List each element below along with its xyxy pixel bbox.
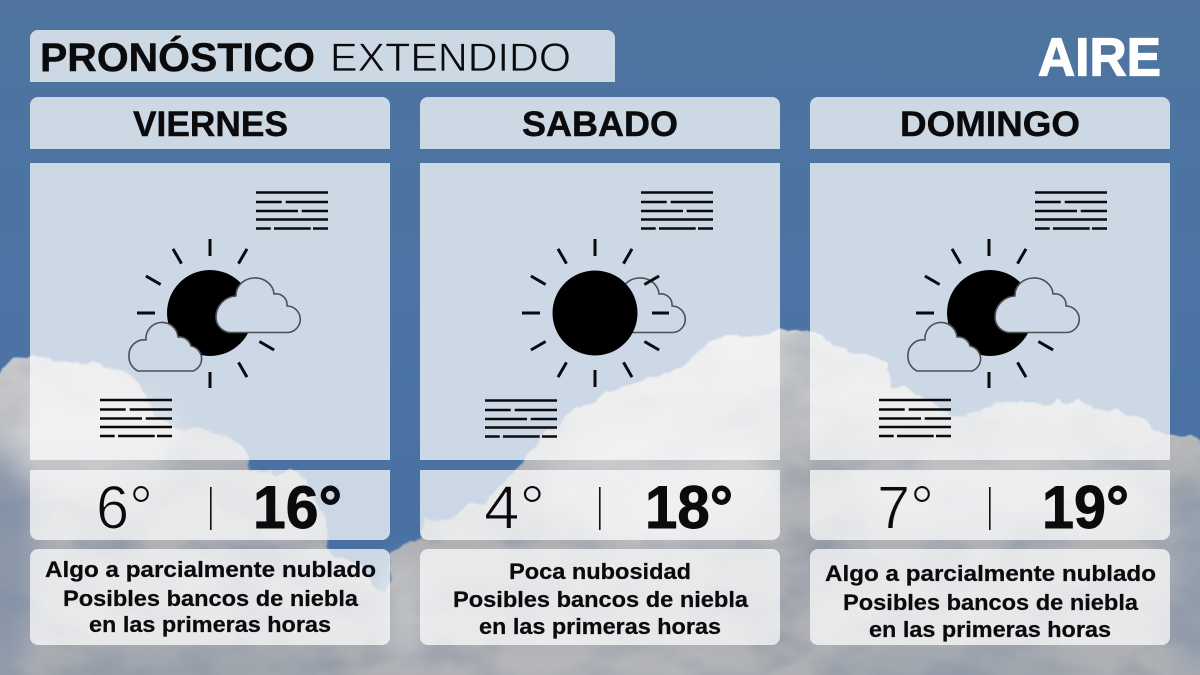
panel: viernes [30, 97, 390, 645]
description: sabado: Poca nubosidad [509, 559, 691, 584]
temperatures: domingo [810, 470, 1170, 542]
icon area: sabado [420, 163, 780, 460]
description: sabado [420, 549, 780, 645]
icon: cloud right [216, 278, 300, 332]
day heading: sabado: SABADO [522, 105, 678, 144]
description: domingo [810, 549, 1170, 645]
icon: fog top [256, 192, 328, 228]
logo: AIRE: AIRE [1038, 28, 1161, 88]
temperatures: sabado: 18° [645, 474, 733, 541]
icon: fog top [641, 192, 713, 228]
panel: sabado [420, 97, 780, 645]
icon: fog top [1035, 192, 1107, 228]
day heading: viernes: VIERNES [133, 105, 288, 144]
day heading: domingo [810, 97, 1170, 149]
icon: cloud left [129, 322, 202, 371]
icon area: viernes [30, 163, 390, 460]
icon area: domingo [810, 163, 1170, 460]
temperatures: viernes: 16° [253, 474, 342, 541]
description: viernes: Algo a parcialmente nublado [45, 557, 376, 582]
icon: fog bottom [879, 400, 951, 436]
icon: sun [522, 239, 669, 387]
icon: cloud behind sun [601, 278, 685, 332]
description: viernes: en las primeras horas [89, 612, 331, 637]
description: viernes: Posibles bancos de niebla [63, 586, 359, 611]
temperatures: domingo: 7° [877, 474, 934, 542]
description: sabado: en las primeras horas [479, 614, 721, 639]
temperatures: viernes: 6° [96, 474, 153, 542]
temperatures: sabado [420, 470, 780, 542]
icon: cloud right [995, 278, 1079, 332]
temperatures: sabado: 4° [484, 474, 545, 542]
icon: fog bottom [485, 400, 557, 436]
icon: fog bottom [100, 400, 172, 436]
icon: sun [916, 239, 1053, 388]
description: domingo: Posibles bancos de niebla [843, 590, 1139, 615]
title text: PRONÓSTICO [40, 34, 315, 80]
panel: domingo [810, 97, 1170, 645]
temperatures: viernes [30, 470, 390, 542]
description: sabado: Posibles bancos de niebla [453, 587, 749, 612]
description: domingo: en las primeras horas [869, 617, 1111, 642]
description: viernes [30, 549, 390, 645]
day heading: viernes [30, 97, 390, 149]
title bar [30, 30, 615, 82]
title text: EXTENDIDO [330, 36, 571, 80]
day heading: sabado [420, 97, 780, 149]
temperatures: domingo: 19° [1042, 474, 1129, 541]
day heading: domingo: DOMINGO [900, 105, 1080, 144]
icon: cloud left [908, 322, 981, 371]
description: domingo: Algo a parcialmente nublado [825, 561, 1156, 586]
icon: sun [137, 239, 274, 388]
